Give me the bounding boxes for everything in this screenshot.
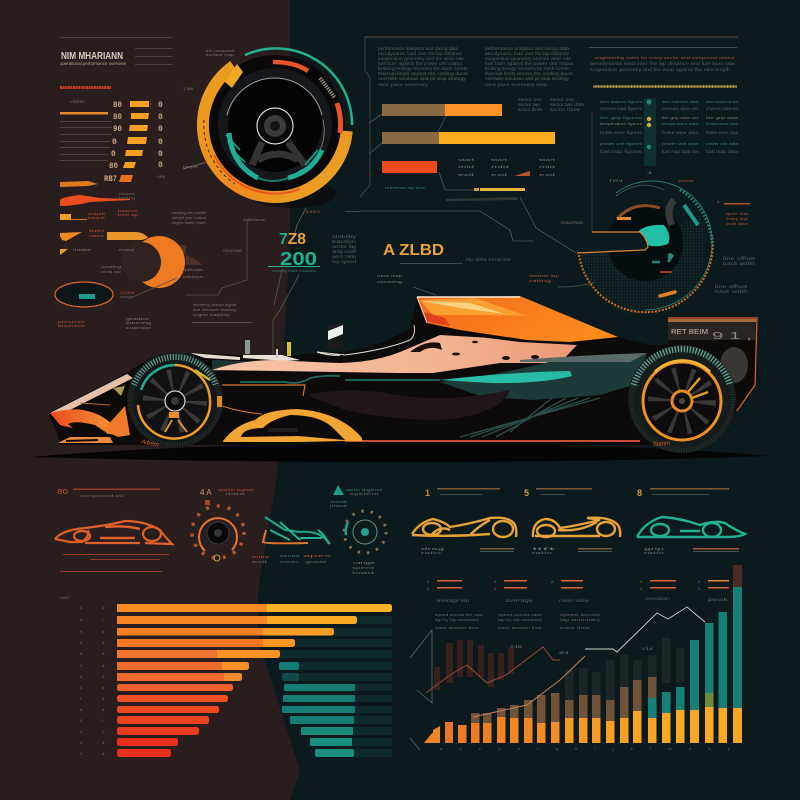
text columns: braking energy recovery for each corner <box>378 66 469 71</box>
orange wheel diagram <box>192 506 244 561</box>
chart header labels: 0 <box>427 579 430 584</box>
chart header labels: median <box>646 596 671 601</box>
bar rows: 90 <box>113 125 122 134</box>
panel: top right data table: power unit data <box>662 141 699 146</box>
engine cover <box>417 296 618 342</box>
red arcs <box>273 62 308 71</box>
text columns: suspension geometry and tire wear rate <box>485 56 572 61</box>
row labels: 6 <box>102 629 105 634</box>
row labels <box>60 595 105 756</box>
chart header labels: lap by lap summary <box>498 617 542 622</box>
row labels: 9 <box>80 629 83 634</box>
chart header labels <box>427 579 730 630</box>
row labels: UNIT <box>60 595 71 600</box>
panel: wing shapes and crescent gauge: surface map <box>206 52 235 57</box>
bar rows: 80 <box>109 162 118 171</box>
header items <box>425 488 729 498</box>
panel: top right data table: temperature figures <box>600 121 642 126</box>
header items: 1 <box>425 488 430 498</box>
rear wing box <box>668 318 757 411</box>
text columns: fuel burn against the power unit output <box>378 61 463 66</box>
panel: top right data table: fuel map data <box>706 149 739 154</box>
chart header labels: average lap <box>437 598 470 603</box>
side teal line <box>240 376 440 383</box>
black body shoulder <box>395 322 577 352</box>
bar rows: 0 <box>111 150 116 159</box>
panel: upper right text and bars: DIAGRAM <box>561 220 583 225</box>
panel: title and ranked list: 1,389 <box>183 86 194 91</box>
panel: upper right text and bars: cornering <box>377 279 402 284</box>
panel: upper right text and bars: mid <box>491 164 509 169</box>
teal brackets <box>229 133 258 178</box>
text columns: performance analytics and racing data <box>378 46 459 51</box>
panel: wing shapes and crescent gauge: torque <box>88 215 106 220</box>
panel: wing shapes and crescent gauge: front lap <box>118 212 139 217</box>
panel: title and ranked list <box>60 37 194 184</box>
row labels: 8 <box>102 663 105 668</box>
chart header labels: 0 <box>494 579 497 584</box>
panel: upper right text and bars: sector three <box>550 107 581 112</box>
panel: wing shapes and crescent gauge: vents low <box>101 269 121 274</box>
chart header labels: average <box>505 598 534 603</box>
row labels: 8 <box>102 740 105 745</box>
panel: radial track gauge: apex line <box>726 211 749 216</box>
roll hoop and antennae <box>245 340 291 358</box>
peach body band <box>212 335 577 373</box>
chart header labels: speed across <box>560 612 600 617</box>
panel: top right data table: brake wear data <box>662 130 699 135</box>
chart header labels: peak <box>708 597 730 602</box>
panel: numeric readouts: sector lap <box>332 244 357 249</box>
panel: wing shapes and crescent gauge: live sensors reading <box>193 307 236 312</box>
panel: small car schematics right <box>412 488 745 555</box>
panel: wing shapes and crescent gauge: GEARUNE <box>223 248 242 253</box>
subtitle: operational performance overview <box>60 61 127 66</box>
chart header labels: lap by lap summary <box>435 617 479 622</box>
bar rows: 0 <box>158 113 163 122</box>
text columns: performance analytics and racing data <box>485 46 570 51</box>
panel: numeric readouts: drag coeff <box>332 249 357 254</box>
chart header labels: speed across race <box>498 612 543 617</box>
nose dark teal cowl <box>212 360 275 372</box>
mesh dial <box>580 215 706 314</box>
row labels: 8 <box>80 674 83 679</box>
text columns: overtake windows and pit stop strategy <box>485 76 570 81</box>
panel: wheel diagrams: phase <box>330 503 348 508</box>
chart header labels: A <box>551 579 554 584</box>
panel: numeric readouts: top speed <box>332 259 357 264</box>
panel: wing shapes and crescent gauge: steering <box>126 320 151 325</box>
panel: top right data table: aero balance data <box>662 99 699 104</box>
panel: wing shapes and crescent gauge: CODE <box>120 290 135 295</box>
teal wheel diagram <box>344 511 386 553</box>
panel: wing shapes and crescent gauge: handling aero profile <box>172 210 207 215</box>
header: 80 <box>57 489 68 496</box>
row labels: f <box>102 617 104 622</box>
bar rows: RB7 <box>104 175 117 184</box>
row labels: f <box>102 718 104 723</box>
header items: 8 <box>637 488 642 498</box>
panel: wing shapes and crescent gauge: suspension <box>126 325 151 330</box>
tire ring <box>203 66 347 197</box>
readout teal: 200 <box>280 249 317 269</box>
panel: radial track gauge: entry line <box>726 216 749 221</box>
chart header labels: 0 <box>698 586 701 591</box>
chart header labels: track session time <box>498 625 543 630</box>
rear wing box: 9 1 , <box>712 331 752 342</box>
panel: wheel diagrams: exit <box>252 559 269 564</box>
panel: wheel diagrams: system <box>349 491 381 496</box>
dark teal tracks <box>280 616 392 757</box>
panel: small car schematics right: grip <box>644 546 666 551</box>
chart header labels: mean value <box>559 598 590 603</box>
vertical stacked bar chart: 84 <box>559 650 571 655</box>
panel: top right data table: power unit data <box>706 141 739 146</box>
header: component list <box>80 493 126 498</box>
rear wheel <box>628 345 736 453</box>
bar rows: 0 <box>158 101 163 110</box>
panel: upper right text and bars <box>360 37 738 295</box>
bar rows: 0 <box>158 150 163 159</box>
panel: radial track gauge: TR4 <box>608 178 625 183</box>
dim red ghost bars <box>434 640 514 690</box>
panel: top right data table: aero balance set <box>706 99 739 104</box>
panel: top right data table: brake wear figures <box>600 130 643 135</box>
panel: wing shapes and crescent gauge: carbon <box>183 274 203 279</box>
panel: radial track gauge <box>577 113 756 314</box>
panel: top right data table: aerodynamic load over the lap distance and fuel burn rate <box>590 61 736 66</box>
chart header labels: 0 <box>427 586 430 591</box>
teal core <box>638 225 669 246</box>
panel: top right data table: chassis load figures <box>600 106 643 111</box>
panel: upper right text and bars: mid <box>539 164 555 169</box>
text columns: race pace summary data <box>485 82 548 87</box>
text columns: fuel burn against the power unit output <box>485 61 574 66</box>
panel: top right data table: tire grip figures <box>600 115 642 120</box>
text columns: suspension geometry and tire wear rate <box>378 56 465 61</box>
panel: upper right text and bars: start <box>539 157 557 162</box>
mirror <box>328 325 343 349</box>
floor streaks <box>460 398 600 437</box>
row labels: 0 <box>80 685 83 690</box>
car silhouette <box>48 296 755 445</box>
sidepod arch <box>223 409 362 442</box>
bar rows <box>104 101 165 184</box>
panel: numeric readouts: traction <box>332 239 357 244</box>
panel: radial track gauge: line offset <box>723 256 756 261</box>
panel: numeric readouts: stability <box>332 234 357 239</box>
x axis ticks: a . b . c . d . e . f . g . h . i . j . k . l . m . n . o . p <box>440 746 731 751</box>
warm segments <box>117 604 392 757</box>
bar rows: 0 <box>158 125 163 134</box>
text columns: aerodynamic load over the lap distance <box>485 51 570 56</box>
panel: small car schematics left <box>55 488 172 572</box>
panel: wing shapes and crescent gauge: telemetry stream signal <box>193 302 236 307</box>
panel: wing shapes and crescent gauge: pressure <box>58 319 86 324</box>
panel: upper right text and bars: start <box>491 157 509 162</box>
panel: top right data table <box>589 47 739 166</box>
dark teal rear body <box>440 353 647 400</box>
dark belly <box>307 390 510 420</box>
row labels: f <box>80 696 82 701</box>
horizontal stacked bar chart <box>60 595 392 757</box>
panel: wing shapes and crescent gauge: exhaust <box>119 247 135 252</box>
rear wing box: RET BEIM <box>671 329 708 336</box>
readout top: 7Z8 <box>279 231 306 248</box>
panel: radial track gauge: zone <box>678 178 695 183</box>
row labels: 3 <box>102 674 105 679</box>
header <box>57 488 160 498</box>
oval gauge <box>55 282 113 307</box>
text columns: thermal limits across the cooling ducts <box>378 71 469 76</box>
yellow stacks <box>424 707 742 743</box>
row labels: 9 <box>102 651 105 656</box>
panel: wing shapes and crescent gauge: cooling <box>101 264 121 269</box>
teal segments <box>279 662 355 757</box>
panel: upper right text and bars: sector one <box>518 97 543 102</box>
text columns: braking energy recovery for each corner <box>485 66 570 71</box>
row labels: 8 <box>102 751 105 756</box>
panel: upper right text and bars: rating <box>529 278 551 283</box>
yellow car one <box>412 518 516 537</box>
panel: small car schematics right: ratio <box>532 550 554 555</box>
teal car diagram <box>263 517 330 544</box>
panel: upper right text and bars: exit <box>458 172 476 177</box>
row labels: 8 <box>80 707 83 712</box>
title: NIM MHARIANN <box>61 51 123 62</box>
chart header labels: speed across the race <box>435 612 484 617</box>
chart header labels: 0 <box>494 586 497 591</box>
panel: wing shapes and crescent gauge: output <box>88 211 106 216</box>
panel: numeric readouts: aero ratio <box>332 254 357 259</box>
panel: wing shapes and crescent gauge: fuel <box>89 228 104 233</box>
panel: top right data table: fuel map figures <box>600 149 643 154</box>
panel: upper right text and bars: track map <box>377 273 403 278</box>
panel: wheel diagrams: entry <box>252 554 269 559</box>
panel: upper right text and bars: exit <box>539 172 557 177</box>
panel: top right data table: temperature data <box>706 121 739 126</box>
text columns <box>378 46 574 87</box>
icon: orange car <box>55 521 172 544</box>
text columns: aerodynamic load over the lap distance <box>378 51 463 56</box>
panel: upper right text and bars: sector two <box>518 102 541 107</box>
cockpit lines <box>317 325 414 355</box>
panel: wing shapes and crescent gauge: tire compound <box>206 48 234 53</box>
orange frame line <box>577 232 648 253</box>
panel: tire gauge <box>203 48 352 240</box>
ground shadow <box>30 443 770 462</box>
panel: wheel diagrams: speed <box>352 565 374 570</box>
panel: wing shapes and crescent gauge: diffuser <box>183 267 204 272</box>
panel: radial track gauge: line offset <box>715 284 748 289</box>
panel: radial track gauge: track width <box>715 289 748 294</box>
outer teal arc <box>245 48 352 125</box>
panel: radial track gauge: 4 <box>647 170 654 175</box>
text columns: overtake windows and pit stop strategy <box>378 76 467 81</box>
panel: tire gauge: 4469 <box>305 209 321 214</box>
panel: upper right text and bars: start <box>458 157 476 162</box>
panel: wheel diagrams: mean <box>280 559 298 564</box>
panel: wing shapes and crescent gauge: engine mapping <box>193 312 229 317</box>
row labels: 6 <box>102 707 105 712</box>
panel: top right data table: chassis data set <box>706 106 739 111</box>
panel: upper right text and bars: mid <box>458 164 474 169</box>
front wheel <box>127 352 223 449</box>
panel: wheel diagrams: data <box>225 491 247 496</box>
bar rows: 0 <box>112 138 117 147</box>
vertical stacked bar chart: V14 <box>641 646 654 651</box>
intake dots <box>452 341 539 360</box>
panel: small car schematics right: ratio <box>644 550 666 555</box>
front wing <box>50 386 130 443</box>
panel: top right data table: engineering notes for every sector and compound choice <box>595 55 736 60</box>
panel: upper right text and bars: sector two data <box>550 102 585 107</box>
row labels: 0 <box>80 605 83 610</box>
chart header labels: lap summary <box>560 617 600 622</box>
panel: wing shapes and crescent gauge: engine brake power <box>172 220 207 225</box>
nose highlight <box>50 374 133 413</box>
chart header labels: 0 <box>640 586 643 591</box>
bar rows: 0 <box>158 138 163 147</box>
row labels: 0 <box>80 751 83 756</box>
panel: wheel diagrams <box>192 485 386 575</box>
panel: wing shapes and crescent gauge: downforce <box>243 217 266 222</box>
big label: A ZLBD <box>383 242 444 259</box>
bar rows: 0 <box>158 161 163 170</box>
teal highlight <box>440 371 572 383</box>
panel: upper right text and bars: exit <box>491 172 509 177</box>
panel: top right data table: temperature data <box>662 121 699 126</box>
row labels: 8 <box>80 617 83 622</box>
panel: numeric readouts <box>268 211 360 370</box>
text columns: thermal limits across the cooling ducts <box>485 71 574 76</box>
chart header labels: 0 <box>698 579 701 584</box>
panel: upper right text and bars: fastest lap <box>529 273 560 278</box>
panel: top right data table: power unit figures <box>600 141 642 146</box>
row labels: 9 <box>102 640 105 645</box>
vertical stacked bar chart: T4B <box>510 644 523 649</box>
row labels: 0 <box>80 729 83 734</box>
row labels: 4 <box>80 740 83 745</box>
row labels: 0 <box>102 729 105 734</box>
text columns: race pace summary <box>378 82 429 87</box>
bar rows: VKB <box>157 174 165 179</box>
panel: small car schematics right: lift <box>532 546 560 551</box>
chart header labels: track time <box>560 625 591 630</box>
chart header labels: track session time <box>435 625 480 630</box>
tyre label: Summ <box>653 441 670 448</box>
panel: top right data table: tire grip data <box>706 115 739 120</box>
red rule <box>60 86 111 89</box>
race car <box>30 296 770 462</box>
panel: wing shapes and crescent gauge: chassis <box>119 191 135 196</box>
chart header labels: 0 <box>640 579 643 584</box>
panel: radial track gauge: exit line <box>726 221 749 226</box>
panel: wheel diagrams: apex <box>303 553 331 558</box>
panel: wing shapes and crescent gauge: balance <box>118 208 139 213</box>
panel: wing shapes and crescent gauge: sector <box>120 294 136 299</box>
row labels: 6 <box>102 685 105 690</box>
panel: wheel diagrams: aero legend <box>346 487 382 492</box>
panel: wheel diagrams: sector <box>280 553 301 558</box>
wheel spokes <box>252 142 305 165</box>
panel: wing shapes and crescent gauge <box>55 48 266 330</box>
panel: top right data table: fuel map data set <box>662 149 699 154</box>
panel: wing shapes and crescent gauge: weight grip control <box>172 215 206 220</box>
panel: upper right text and bars: reference lap time <box>385 185 426 190</box>
teal stacks <box>648 587 742 718</box>
ghost bars dark <box>565 638 684 702</box>
bar rows: 80 <box>113 101 122 110</box>
panel: wing shapes and crescent gauge: temperature <box>58 323 86 328</box>
panel: wheel diagrams: mode <box>330 499 348 504</box>
row labels: 6 <box>102 696 105 701</box>
header items: 5 <box>524 488 529 498</box>
horizontal bar chart <box>382 104 555 173</box>
panel: wheel diagrams: 4 A <box>200 488 212 497</box>
panel: wheel diagrams: system legend <box>218 487 253 492</box>
panel: top right data table: brake wear data <box>706 130 738 135</box>
panel: wheel diagrams: grade <box>305 559 329 564</box>
crescent gauge <box>107 232 203 288</box>
panel: upper right text and bars: sector one <box>550 97 575 102</box>
row labels: 5 <box>80 651 83 656</box>
row labels: 5 <box>80 718 83 723</box>
panel: small car schematics right: drag <box>421 546 444 551</box>
row labels: 0 <box>80 663 83 668</box>
row labels: 0 <box>102 605 105 610</box>
tyre label: Adrem <box>140 439 159 449</box>
panel: radial track gauge: track width <box>723 261 756 266</box>
bar rows: 80 <box>113 113 122 122</box>
panel: wheel diagrams: range <box>353 560 377 565</box>
panel: top right data table: suspension geometry and tire wear against the stint length <box>590 67 731 72</box>
row labels: 6 <box>80 640 83 645</box>
panel: wing shapes and crescent gauge: tuning <box>119 195 135 200</box>
panel: radial track gauge: A <box>717 199 720 204</box>
panel: wing shapes and crescent gauge: gearbox <box>126 316 149 321</box>
brown stacks <box>471 677 656 725</box>
hub <box>257 108 293 144</box>
panel: upper right text and bars: lap delta trend line <box>466 257 512 262</box>
panel: top right data table: chassis data set <box>662 106 699 111</box>
teal car <box>637 517 745 537</box>
chart lines <box>426 647 560 693</box>
panel: wing shapes and crescent gauge: intake <box>73 247 92 252</box>
panel: wing shapes and crescent gauge: torque <box>183 164 199 169</box>
panel: wheel diagrams: load <box>352 570 374 575</box>
panel: title and ranked list: VINDEK <box>70 99 85 104</box>
panel: top right data table: aero balance figures <box>600 99 642 104</box>
panel: upper right text and bars: sector three <box>518 107 542 112</box>
vertical stacked bar chart <box>410 565 742 751</box>
panel: numeric readouts: velocity index measure <box>272 268 317 273</box>
floor line <box>345 440 640 442</box>
panel: small car schematics right: ratio <box>421 550 443 555</box>
panel: wing shapes and crescent gauge: rates <box>89 233 104 238</box>
panel: top right data table: tire grip data set <box>662 115 699 120</box>
yellow car two <box>533 518 620 537</box>
